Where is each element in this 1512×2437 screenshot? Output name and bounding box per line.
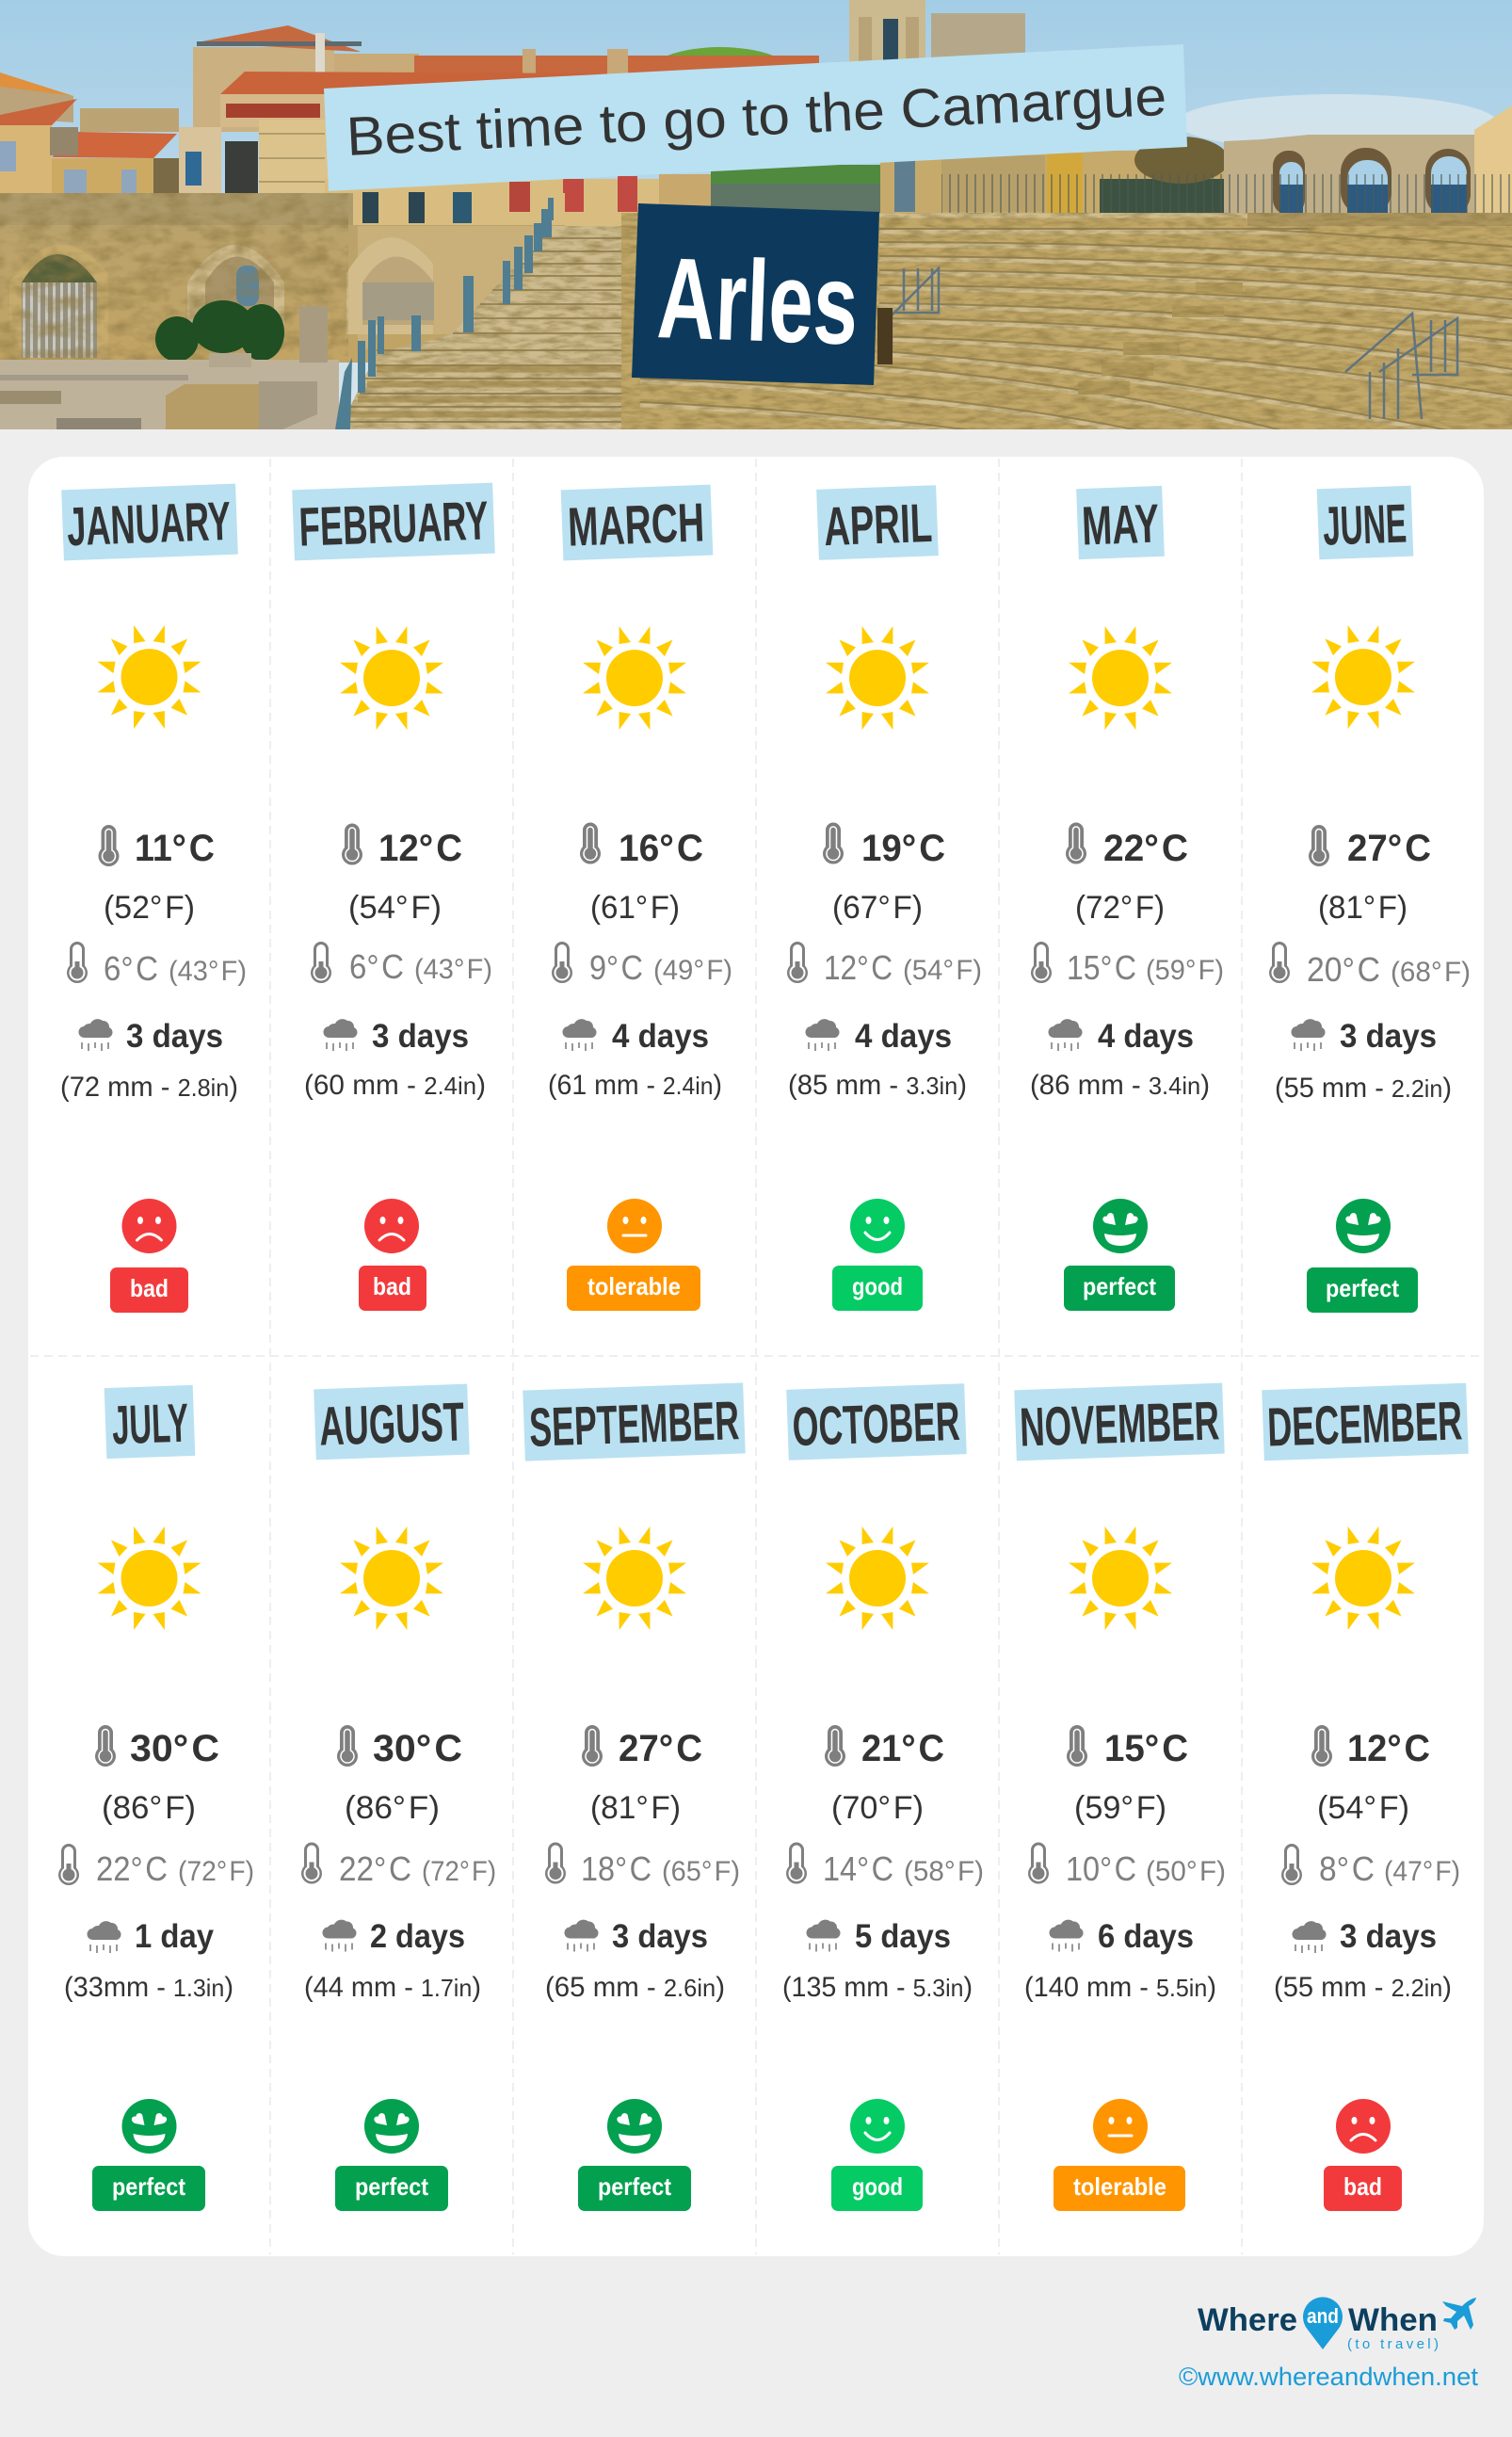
panel: May bbox=[1030, 486, 1224, 1311]
rainy days: 4 days bbox=[612, 1018, 709, 1055]
panel: January bbox=[60, 484, 247, 1313]
rainy days: 6 days bbox=[1098, 1918, 1194, 1955]
high temperature: 30° C bbox=[130, 1728, 219, 1769]
high temperature fahrenheit: (67° F) bbox=[832, 890, 923, 926]
icon: rain cloud bbox=[806, 1920, 841, 1951]
photo: green bushes bbox=[155, 300, 284, 362]
title banner bbox=[324, 44, 1187, 191]
panel: March bbox=[548, 485, 732, 1311]
high temperature: 12° C bbox=[1347, 1728, 1430, 1769]
icon: rain cloud bbox=[1291, 1019, 1326, 1051]
icon: rain cloud bbox=[323, 1019, 358, 1051]
rainfall: (61 mm - 2.4in) bbox=[548, 1070, 722, 1101]
icon: thermometer low bbox=[1031, 942, 1052, 983]
rating badge bbox=[1324, 2166, 1402, 2211]
icon: thermometer high bbox=[825, 1725, 845, 1767]
rainfall: (85 mm - 3.3in) bbox=[788, 1070, 967, 1101]
icon: thermometer low bbox=[301, 1842, 322, 1884]
month heading: JUNE bbox=[1322, 492, 1407, 557]
rating badge: perfect bbox=[1083, 1272, 1156, 1300]
low temperature: 15° C bbox=[1067, 948, 1136, 987]
panel: December bbox=[1262, 1383, 1469, 2211]
rainy days: 3 days bbox=[1340, 1918, 1437, 1955]
icon: rain cloud bbox=[1048, 1019, 1083, 1051]
low temperature: 12° C bbox=[824, 948, 893, 987]
icon: sun bbox=[1069, 626, 1172, 730]
rating badge bbox=[831, 2166, 923, 2211]
low temperature bbox=[1319, 1849, 1460, 1888]
icon: rain cloud bbox=[322, 1920, 357, 1951]
high temperature: 27° C bbox=[619, 1728, 702, 1769]
low temperature bbox=[581, 1849, 740, 1888]
high temperature fahrenheit: (52° F) bbox=[104, 890, 195, 926]
icon: heart eyes face bbox=[1336, 1199, 1391, 1253]
icon: thermometer high bbox=[580, 823, 601, 864]
high temperature: 27° C bbox=[1347, 828, 1431, 869]
rating badge: tolerable bbox=[1073, 2172, 1166, 2201]
rainfall: (135 mm - 5.3in) bbox=[782, 1972, 973, 2003]
panel: June bbox=[1269, 486, 1471, 1313]
month heading: FEBRUARY bbox=[298, 490, 490, 558]
icon: sun bbox=[98, 1526, 201, 1630]
low temperature: (65° F) bbox=[662, 1856, 740, 1887]
icon: neutral face bbox=[607, 1199, 662, 1253]
rainfall: (140 mm - 5.5in) bbox=[1024, 1972, 1216, 2003]
month heading bbox=[314, 1384, 470, 1460]
rating badge bbox=[1054, 2166, 1185, 2211]
month heading bbox=[786, 1383, 967, 1461]
low temperature bbox=[1307, 950, 1471, 989]
icon: sun bbox=[1069, 1526, 1172, 1630]
high temperature fahrenheit: (61° F) bbox=[590, 890, 680, 926]
high temperature fahrenheit: (59° F) bbox=[1074, 1790, 1166, 1826]
low temperature: (59° F) bbox=[1146, 955, 1224, 986]
photo: blue staircase railing bbox=[335, 198, 554, 429]
rating badge bbox=[359, 1266, 426, 1311]
low temperature: 22° C bbox=[339, 1849, 411, 1888]
low temperature bbox=[104, 949, 247, 988]
rainy days: 3 days bbox=[1340, 1018, 1437, 1055]
logo: Where and When to travel bbox=[1198, 2297, 1476, 2352]
icon: heart eyes face bbox=[1093, 1199, 1148, 1253]
logo tagline: (to travel) bbox=[1347, 2336, 1439, 2352]
month heading: MARCH bbox=[567, 492, 705, 558]
high temperature fahrenheit: (70° F) bbox=[831, 1790, 924, 1826]
low temperature: 20° C bbox=[1307, 950, 1380, 989]
icon: airplane bbox=[1442, 2298, 1476, 2330]
icon: smiling face bbox=[850, 1199, 905, 1253]
icon: thermometer high bbox=[582, 1725, 603, 1767]
month heading bbox=[292, 483, 495, 560]
month heading bbox=[816, 485, 939, 560]
rainy days: 2 days bbox=[370, 1918, 465, 1955]
high temperature: 22° C bbox=[1103, 828, 1188, 869]
icon: rain cloud bbox=[562, 1019, 597, 1051]
icon: sun bbox=[1311, 1526, 1415, 1630]
rainy days: 1 day bbox=[135, 1918, 215, 1955]
rating badge bbox=[567, 1266, 700, 1311]
low temperature: (72° F) bbox=[178, 1856, 254, 1887]
high temperature: 21° C bbox=[861, 1728, 944, 1769]
icon: rain cloud bbox=[564, 1920, 599, 1951]
photo: pale cloud at right bbox=[1186, 94, 1494, 143]
rating badge bbox=[578, 2166, 691, 2211]
website credit: ©www.whereandwhen.net bbox=[1179, 2363, 1478, 2391]
high temperature: 15° C bbox=[1104, 1728, 1188, 1769]
photo: wall under banner with windows and shutters bbox=[325, 174, 711, 226]
month heading bbox=[523, 1382, 746, 1461]
icon: thermometer high bbox=[1311, 1725, 1332, 1767]
icon: thermometer high bbox=[1067, 1725, 1087, 1767]
low temperature: 10° C bbox=[1066, 1849, 1136, 1888]
rainy days: 3 days bbox=[372, 1018, 469, 1055]
rainfall: (60 mm - 2.4in) bbox=[304, 1070, 486, 1101]
rating badge: bad bbox=[130, 1274, 169, 1302]
high temperature fahrenheit: (72° F) bbox=[1075, 890, 1165, 926]
low temperature: (72° F) bbox=[422, 1856, 496, 1887]
low temperature bbox=[1067, 948, 1224, 987]
low temperature: (47° F) bbox=[1384, 1856, 1460, 1887]
icon: thermometer high bbox=[95, 1725, 116, 1767]
icon: sun bbox=[98, 625, 201, 729]
photo: stone wall with arches bbox=[0, 182, 565, 363]
icon: sad face bbox=[122, 1199, 177, 1253]
icon: thermometer low bbox=[787, 942, 808, 983]
low temperature: (43° F) bbox=[414, 954, 492, 985]
high temperature fahrenheit: (54° F) bbox=[1317, 1790, 1409, 1826]
icon: thermometer low bbox=[552, 942, 572, 983]
panel: February bbox=[292, 483, 495, 1311]
icon: thermometer low bbox=[786, 1842, 807, 1884]
icon: thermometer low bbox=[545, 1842, 566, 1884]
photo: green tree bbox=[668, 47, 773, 56]
photo: centre tree and wall right of the title block bbox=[711, 137, 1238, 217]
rainfall: (86 mm - 3.4in) bbox=[1030, 1070, 1210, 1101]
panel: September bbox=[523, 1382, 746, 2211]
icon: rain cloud bbox=[805, 1019, 840, 1051]
low temperature: 14° C bbox=[823, 1849, 893, 1888]
rating badge: good bbox=[852, 2172, 903, 2201]
panel: monthly calendar card bbox=[28, 457, 1484, 2256]
photo: Roman arcade bbox=[941, 105, 1512, 217]
city name block bbox=[632, 203, 879, 385]
icon: sun bbox=[583, 1526, 686, 1630]
high temperature: 11° C bbox=[135, 828, 215, 869]
rating badge: perfect bbox=[355, 2172, 428, 2201]
rating badge bbox=[92, 2166, 205, 2211]
month heading: APRIL bbox=[823, 492, 933, 557]
city name text: Arles bbox=[655, 234, 861, 368]
low temperature: 18° C bbox=[581, 1849, 651, 1888]
logo word: and: and bbox=[1307, 2304, 1339, 2328]
high temperature: 12° C bbox=[378, 828, 462, 869]
title text: Best time to go to the Camargue bbox=[345, 66, 1168, 168]
icon: thermometer high bbox=[1309, 825, 1329, 866]
month heading: JULY bbox=[111, 1393, 189, 1456]
icon: rain cloud bbox=[1292, 1921, 1327, 1953]
high temperature: 30° C bbox=[373, 1728, 462, 1769]
icon: sun bbox=[583, 626, 686, 730]
low temperature bbox=[824, 948, 982, 987]
icon: thermometer high bbox=[823, 823, 844, 864]
rating badge: bad bbox=[1343, 2172, 1382, 2201]
month heading bbox=[1317, 486, 1413, 559]
panel: July bbox=[58, 1385, 254, 2211]
icon: map pin bbox=[1303, 2297, 1343, 2349]
month heading: AUGUST bbox=[318, 1391, 465, 1458]
icon: sun bbox=[826, 626, 929, 730]
icon: sun bbox=[340, 1526, 443, 1630]
high temperature fahrenheit: (81° F) bbox=[590, 1790, 681, 1826]
rating badge bbox=[335, 2166, 448, 2211]
rating badge: good bbox=[852, 1272, 903, 1300]
month heading bbox=[1076, 486, 1165, 559]
high temperature fahrenheit: (86° F) bbox=[345, 1790, 440, 1826]
rating badge bbox=[1307, 1267, 1418, 1313]
rainy days: 4 days bbox=[855, 1018, 952, 1055]
high temperature fahrenheit: (86° F) bbox=[102, 1790, 196, 1826]
rating badge: bad bbox=[373, 1272, 411, 1300]
month heading bbox=[105, 1385, 195, 1459]
icon: thermometer high bbox=[1066, 823, 1086, 864]
icon: heart eyes face bbox=[607, 2099, 662, 2154]
rainy days: 5 days bbox=[855, 1918, 951, 1955]
icon: heart eyes face bbox=[364, 2099, 419, 2154]
month heading: MAY bbox=[1081, 493, 1160, 557]
icon: thermometer low bbox=[67, 942, 88, 983]
icon: thermometer low bbox=[58, 1844, 79, 1885]
header photo: Arles amphitheatre bbox=[0, 0, 1512, 455]
low temperature bbox=[339, 1849, 496, 1888]
icon: thermometer high bbox=[98, 825, 119, 866]
photo: ground and low blocks bbox=[0, 306, 339, 429]
icon: smiling face bbox=[850, 2099, 905, 2154]
icon: neutral face bbox=[1093, 2099, 1148, 2154]
rainy days: 3 days bbox=[126, 1018, 223, 1055]
photo: left houses bbox=[0, 25, 819, 194]
icon: rain cloud bbox=[1049, 1920, 1084, 1951]
low temperature: 6° C bbox=[104, 949, 158, 988]
icon: thermometer high bbox=[337, 1725, 358, 1767]
photo: church tower and square tower bbox=[849, 0, 1025, 66]
logo word: When: When bbox=[1348, 2302, 1438, 2338]
icon: sad face bbox=[1336, 2099, 1391, 2154]
rainfall: (33mm - 1.3in) bbox=[64, 1972, 233, 2003]
rating badge: perfect bbox=[1326, 1274, 1399, 1302]
icon: thermometer low bbox=[1269, 942, 1290, 983]
panel: November bbox=[1014, 1383, 1226, 2211]
rainfall: (44 mm - 1.7in) bbox=[304, 1972, 481, 2003]
high temperature: 16° C bbox=[619, 828, 703, 869]
photo: right railings and fence details bbox=[892, 268, 1457, 419]
rating badge: perfect bbox=[112, 2172, 185, 2201]
low temperature bbox=[96, 1849, 254, 1888]
icon: sun bbox=[826, 1526, 929, 1630]
rainy days: 3 days bbox=[612, 1918, 708, 1955]
icon: rain cloud bbox=[78, 1019, 113, 1051]
low temperature bbox=[349, 947, 492, 986]
low temperature: 6° C bbox=[349, 947, 404, 986]
icon: rain cloud bbox=[87, 1921, 121, 1953]
panel: August bbox=[301, 1384, 496, 2211]
rating badge: perfect bbox=[598, 2172, 671, 2201]
low temperature: (58° F) bbox=[904, 1856, 984, 1887]
icon: thermometer high bbox=[342, 823, 362, 865]
month heading bbox=[1014, 1383, 1225, 1461]
icon: sun bbox=[1311, 625, 1415, 729]
icon: heart eyes face bbox=[122, 2099, 177, 2154]
month heading: NOVEMBER bbox=[1019, 1390, 1220, 1459]
rating badge bbox=[110, 1267, 188, 1313]
month heading bbox=[561, 485, 713, 560]
month heading: JANUARY bbox=[66, 491, 232, 557]
high temperature fahrenheit: (81° F) bbox=[1318, 890, 1407, 926]
photo: amphitheatre seating bbox=[621, 213, 1512, 429]
rating badge: tolerable bbox=[587, 1272, 681, 1300]
rainfall: (55 mm - 2.2in) bbox=[1275, 1073, 1452, 1104]
low temperature: (43° F) bbox=[169, 956, 247, 987]
rainfall: (55 mm - 2.2in) bbox=[1274, 1972, 1452, 2003]
photo: dark opening bbox=[877, 308, 893, 364]
low temperature bbox=[589, 948, 732, 987]
month heading: SEPTEMBER bbox=[528, 1390, 740, 1459]
low temperature: (68° F) bbox=[1391, 957, 1471, 988]
high temperature fahrenheit: (54° F) bbox=[348, 890, 442, 926]
rainfall: (65 mm - 2.6in) bbox=[545, 1972, 725, 2003]
photo: central staircase bbox=[339, 226, 640, 429]
month heading: OCTOBER bbox=[792, 1391, 961, 1458]
rating badge bbox=[1064, 1266, 1175, 1311]
icon: thermometer low bbox=[1281, 1844, 1302, 1885]
icon: sun bbox=[340, 626, 443, 730]
icon: thermometer low bbox=[1028, 1842, 1049, 1884]
low temperature bbox=[1066, 1849, 1226, 1888]
month heading bbox=[61, 484, 238, 560]
rating badge bbox=[832, 1266, 923, 1311]
panel: October bbox=[782, 1383, 984, 2211]
low temperature bbox=[823, 1849, 984, 1888]
low temperature: 8° C bbox=[1319, 1849, 1375, 1888]
low temperature: (54° F) bbox=[903, 955, 982, 986]
low temperature: 22° C bbox=[96, 1849, 168, 1888]
icon: thermometer low bbox=[311, 942, 331, 983]
low temperature: 9° C bbox=[589, 948, 643, 987]
panel: April bbox=[787, 485, 982, 1311]
rainfall: (72 mm - 2.8in) bbox=[60, 1072, 238, 1103]
low temperature: (50° F) bbox=[1146, 1856, 1226, 1887]
rainy days: 4 days bbox=[1098, 1018, 1194, 1055]
low temperature: (49° F) bbox=[653, 955, 732, 986]
high temperature: 19° C bbox=[861, 828, 945, 869]
icon: sad face bbox=[364, 1199, 419, 1253]
logo word: Where: Where bbox=[1198, 2302, 1297, 2338]
